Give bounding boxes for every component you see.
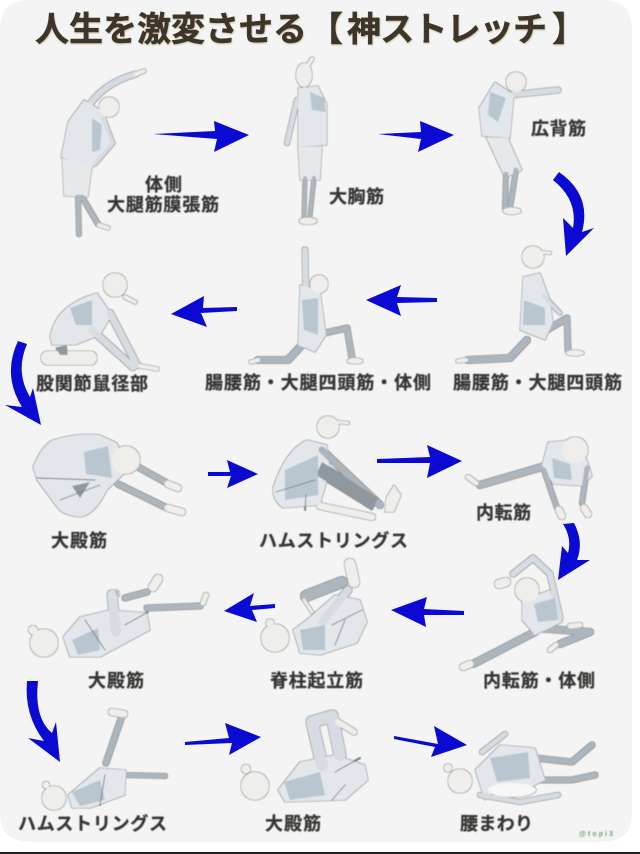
- label: body side, TFL: 体側: [145, 175, 182, 195]
- arrow 14: [394, 726, 467, 757]
- arrow 8: [377, 445, 462, 478]
- curved arrow 6: [5, 341, 41, 425]
- label: erector spinae: 脊柱起立筋: [270, 670, 363, 691]
- arrow 2: [378, 121, 454, 152]
- label: adductors: 内転筋: [476, 503, 531, 523]
- figure 7: rounded seated bend: [33, 434, 182, 517]
- label: iliopsoas, quadriceps, body side: 腸腰筋・大腿四頭筋・体側: [205, 373, 431, 393]
- figure 11: lying spine stretch: [261, 564, 367, 655]
- label: gluteus maximus: 大殿筋: [265, 814, 321, 834]
- label: hamstrings: ハムストリングス: [259, 530, 408, 551]
- curved arrow 3: [553, 172, 594, 256]
- arrow 4: [366, 285, 437, 316]
- figure 6: seated forward bend: [48, 273, 157, 369]
- figure 15: lying twist: [444, 734, 595, 802]
- figure 9: wide leg bend: [468, 437, 592, 516]
- arrow 11: [224, 593, 275, 622]
- arrow 13: [185, 723, 261, 755]
- figure 13: lying hamstring stretch: [42, 712, 165, 810]
- figure 12: lying knee pull: [28, 579, 206, 657]
- figure 4: lunge: [458, 246, 584, 361]
- title: 人生を激変させる: [35, 11, 307, 49]
- arrow 1: [153, 121, 249, 152]
- label: adductors, body side: 内転筋・体側: [483, 671, 595, 691]
- label: body side, TFL: [107, 175, 219, 215]
- label: latissimus: 広背筋: [531, 119, 586, 139]
- figure 2: standing chest stretch: [287, 59, 327, 224]
- arrow 7: [208, 460, 258, 488]
- watermark: @topi3: [579, 831, 613, 838]
- figure 3: forward reach: [479, 72, 558, 214]
- label: gluteus maximus: 大殿筋: [88, 671, 144, 691]
- title: 神ストレッチ: [347, 11, 547, 49]
- label: around the waist: 腰まわり: [460, 814, 533, 834]
- title: 】: [552, 11, 586, 49]
- label: hip joint, groin: 股関節鼠径部: [36, 373, 148, 394]
- curved arrow 12: [27, 681, 60, 762]
- bottom edge line: [0, 852, 640, 854]
- figure 1: standing side bend: [61, 71, 144, 234]
- figure 14: lying knee hug: [241, 716, 368, 802]
- arrow 10: [391, 597, 464, 627]
- label: gluteus maximus: 大殿筋: [51, 531, 107, 551]
- label: iliopsoas, quadriceps: 腸腰筋・大腿四頭筋: [453, 373, 622, 393]
- label: pectoralis: 大胸筋: [329, 187, 384, 207]
- label: body side, TFL: 大腿筋膜張筋: [107, 195, 219, 215]
- figure 10: twisted side lying: [463, 558, 590, 667]
- arrow 5: [171, 296, 237, 327]
- title: 【: [309, 11, 343, 49]
- label: hamstrings: ハムストリングス: [18, 813, 167, 834]
- figure 5: lunge with arm up: [251, 250, 363, 364]
- figure 8: seated leg stretch: [273, 416, 401, 517]
- curved arrow 9: [558, 523, 590, 580]
